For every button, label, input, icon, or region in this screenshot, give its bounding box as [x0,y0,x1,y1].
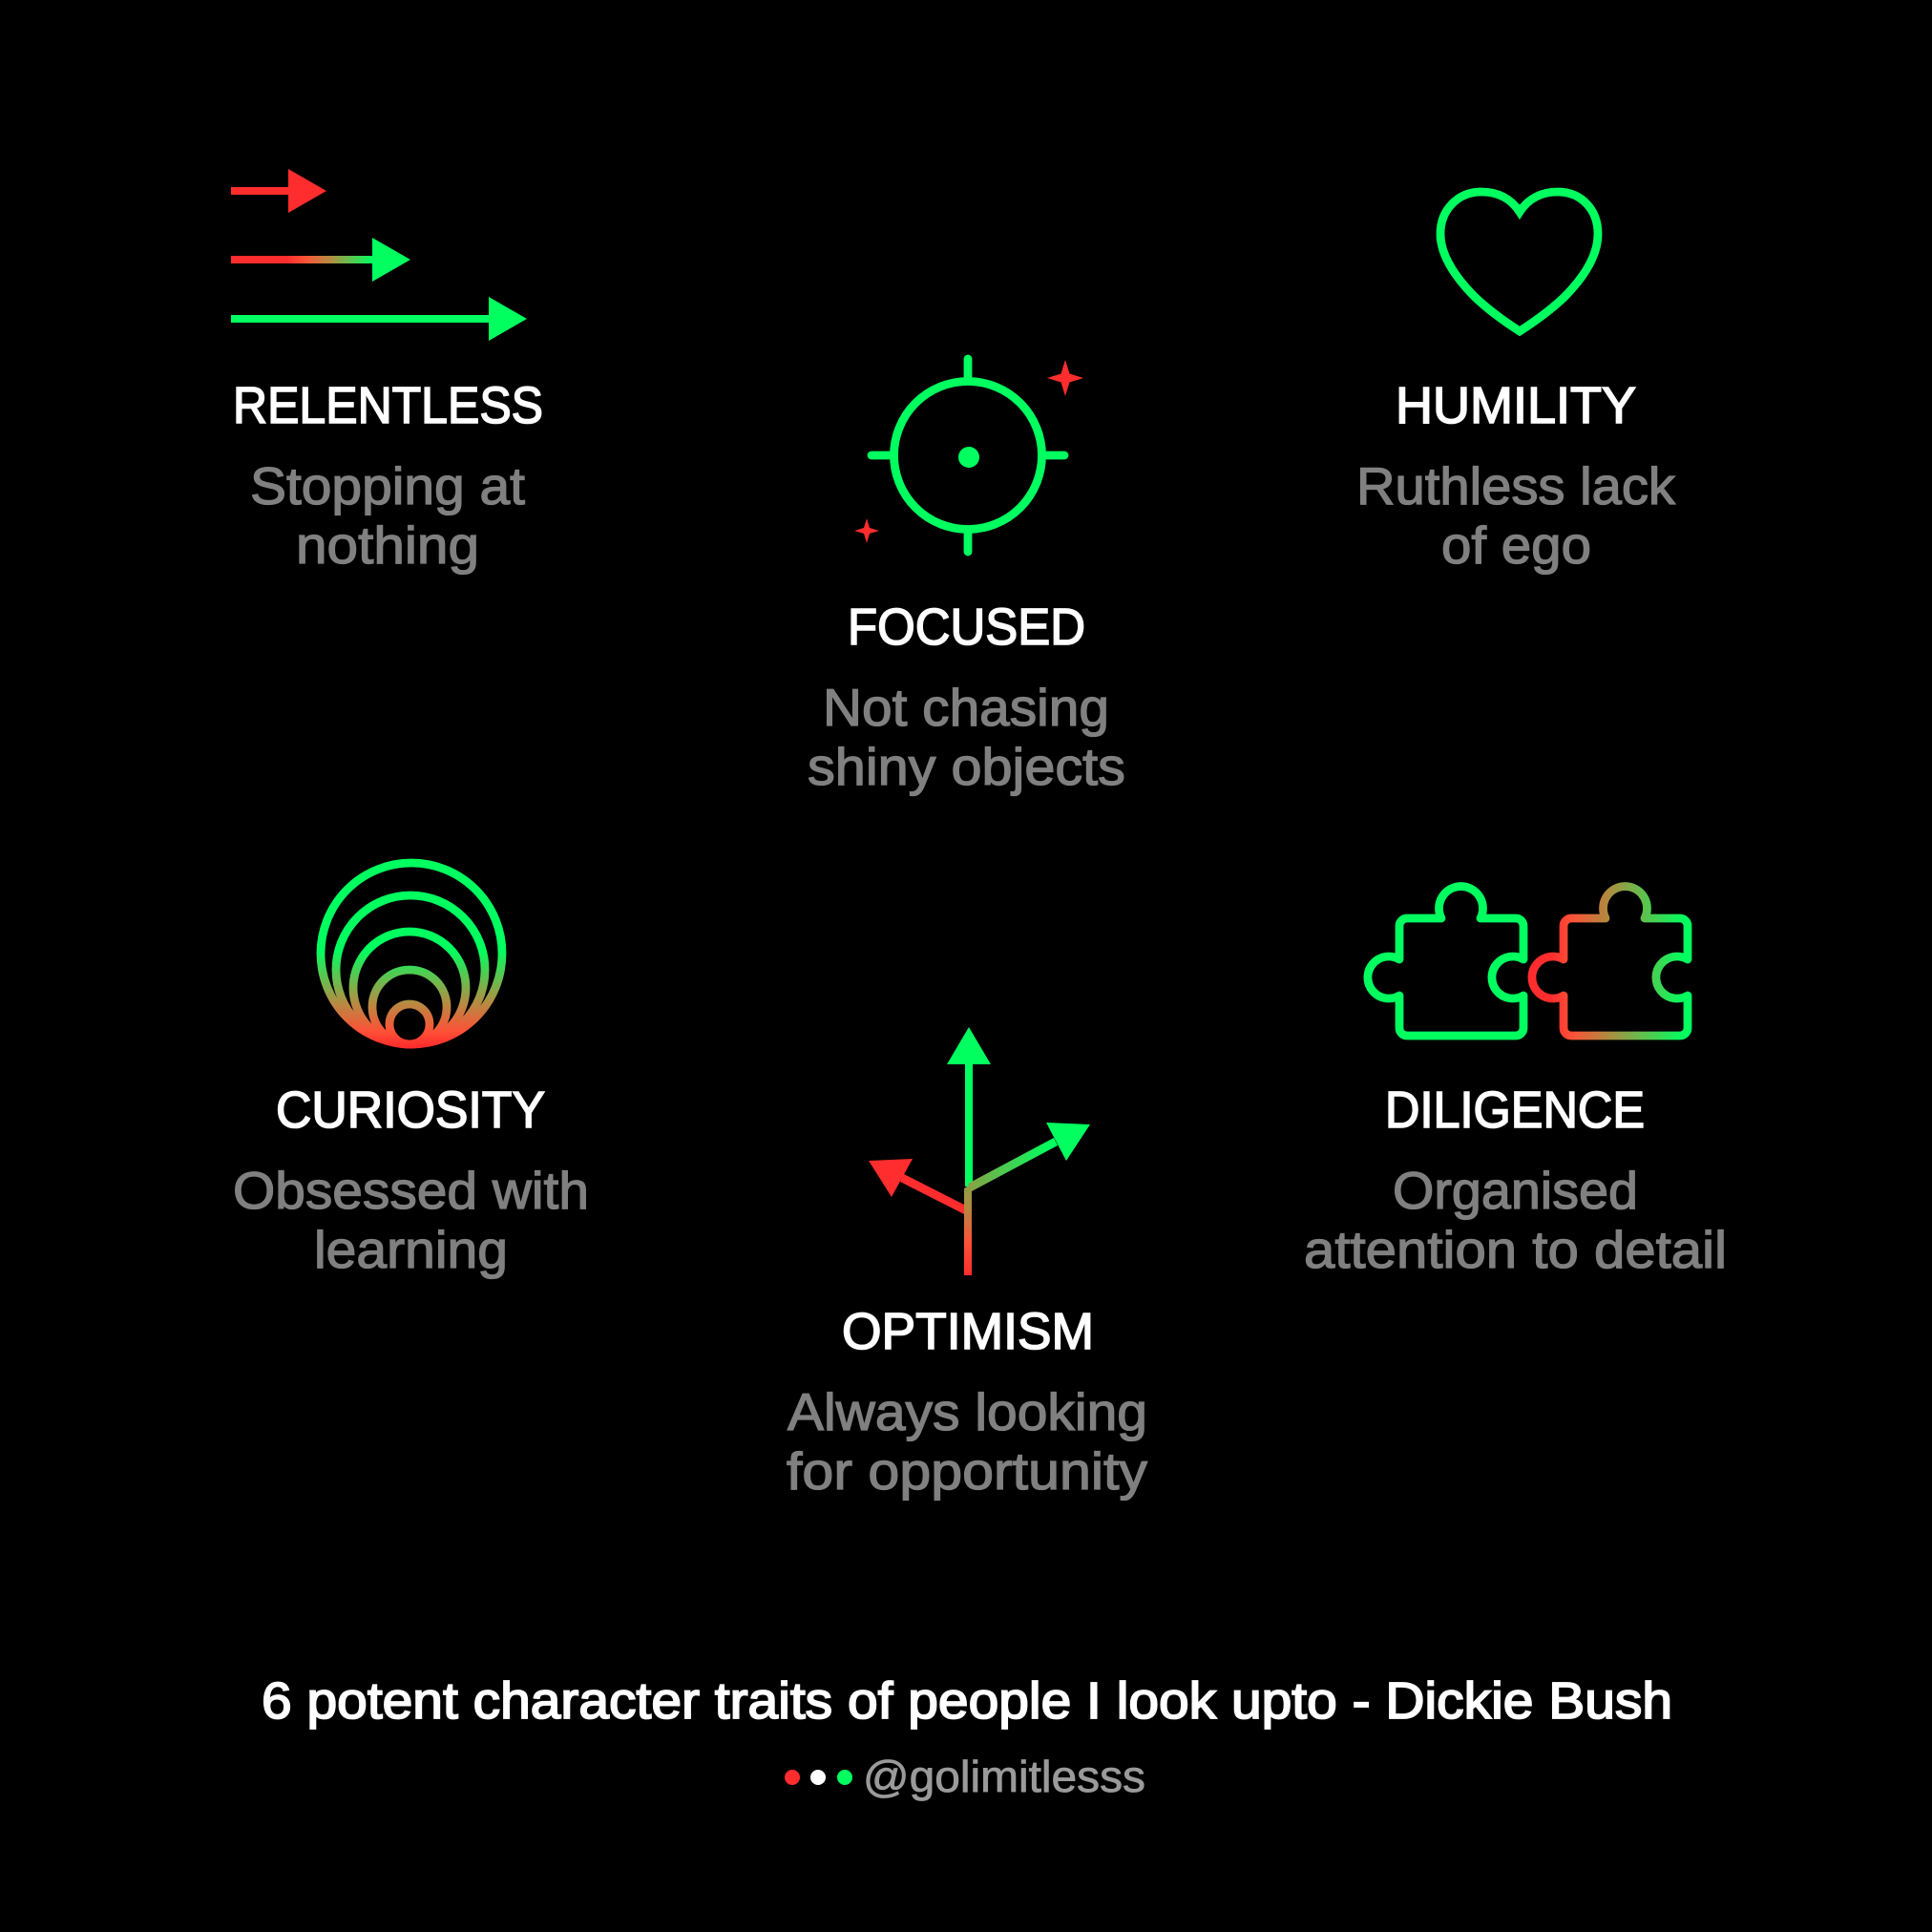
heading: focused: FOCUSED [848,598,1085,656]
heading: relentless: RELENTLESS [233,377,543,434]
text: relentless description: nothing [296,515,479,575]
text: optimism description: Always looking [788,1382,1147,1441]
icon: nested circles [321,863,502,1044]
panel: optimism [787,1027,1148,1501]
text: handle: @golimitlesss [863,1752,1145,1801]
panel: relentless [231,169,543,575]
text: relentless description: Stopping at [250,456,525,515]
text: curiosity description: Obsessed with [233,1161,589,1220]
text: humility description: Ruthless lack [1356,456,1676,515]
text: humility description [1356,456,1676,575]
text: optimism description [787,1382,1148,1501]
panel: diligence [1304,887,1727,1279]
text: focused description: shiny objects [808,737,1125,796]
heading: optimism: OPTIMISM [842,1303,1094,1360]
heading: diligence: DILIGENCE [1385,1082,1645,1139]
icon: crosshair target with sparkles [854,359,1083,552]
text: diligence description: Organised [1393,1161,1638,1220]
text: diligence description [1304,1161,1727,1279]
text: diligence description: attention to detail [1304,1220,1727,1279]
text: relentless description [250,456,525,575]
panel: focused [808,359,1125,796]
icon: branching arrows [869,1027,1090,1275]
heading: curiosity: CURIOSITY [276,1082,545,1139]
icon: three progressing arrows [231,169,527,341]
panel: humility [1356,192,1676,575]
icon: heart [1440,192,1598,331]
text: curiosity description: learning [314,1220,508,1279]
icon: three dots [785,1770,852,1785]
text: focused description [808,678,1125,796]
title: 6 potent character traits of people I look upto - Dickie Bush [262,1672,1672,1730]
text: optimism description: for opportunity [787,1441,1148,1501]
credit [785,1752,1145,1801]
text: curiosity description [233,1161,589,1279]
heading: humility: HUMILITY [1396,377,1636,434]
icon: puzzle pieces [1368,887,1688,1036]
text: focused description: Not chasing [823,678,1109,737]
panel: curiosity [233,863,589,1279]
text: humility description: of ego [1441,515,1591,575]
